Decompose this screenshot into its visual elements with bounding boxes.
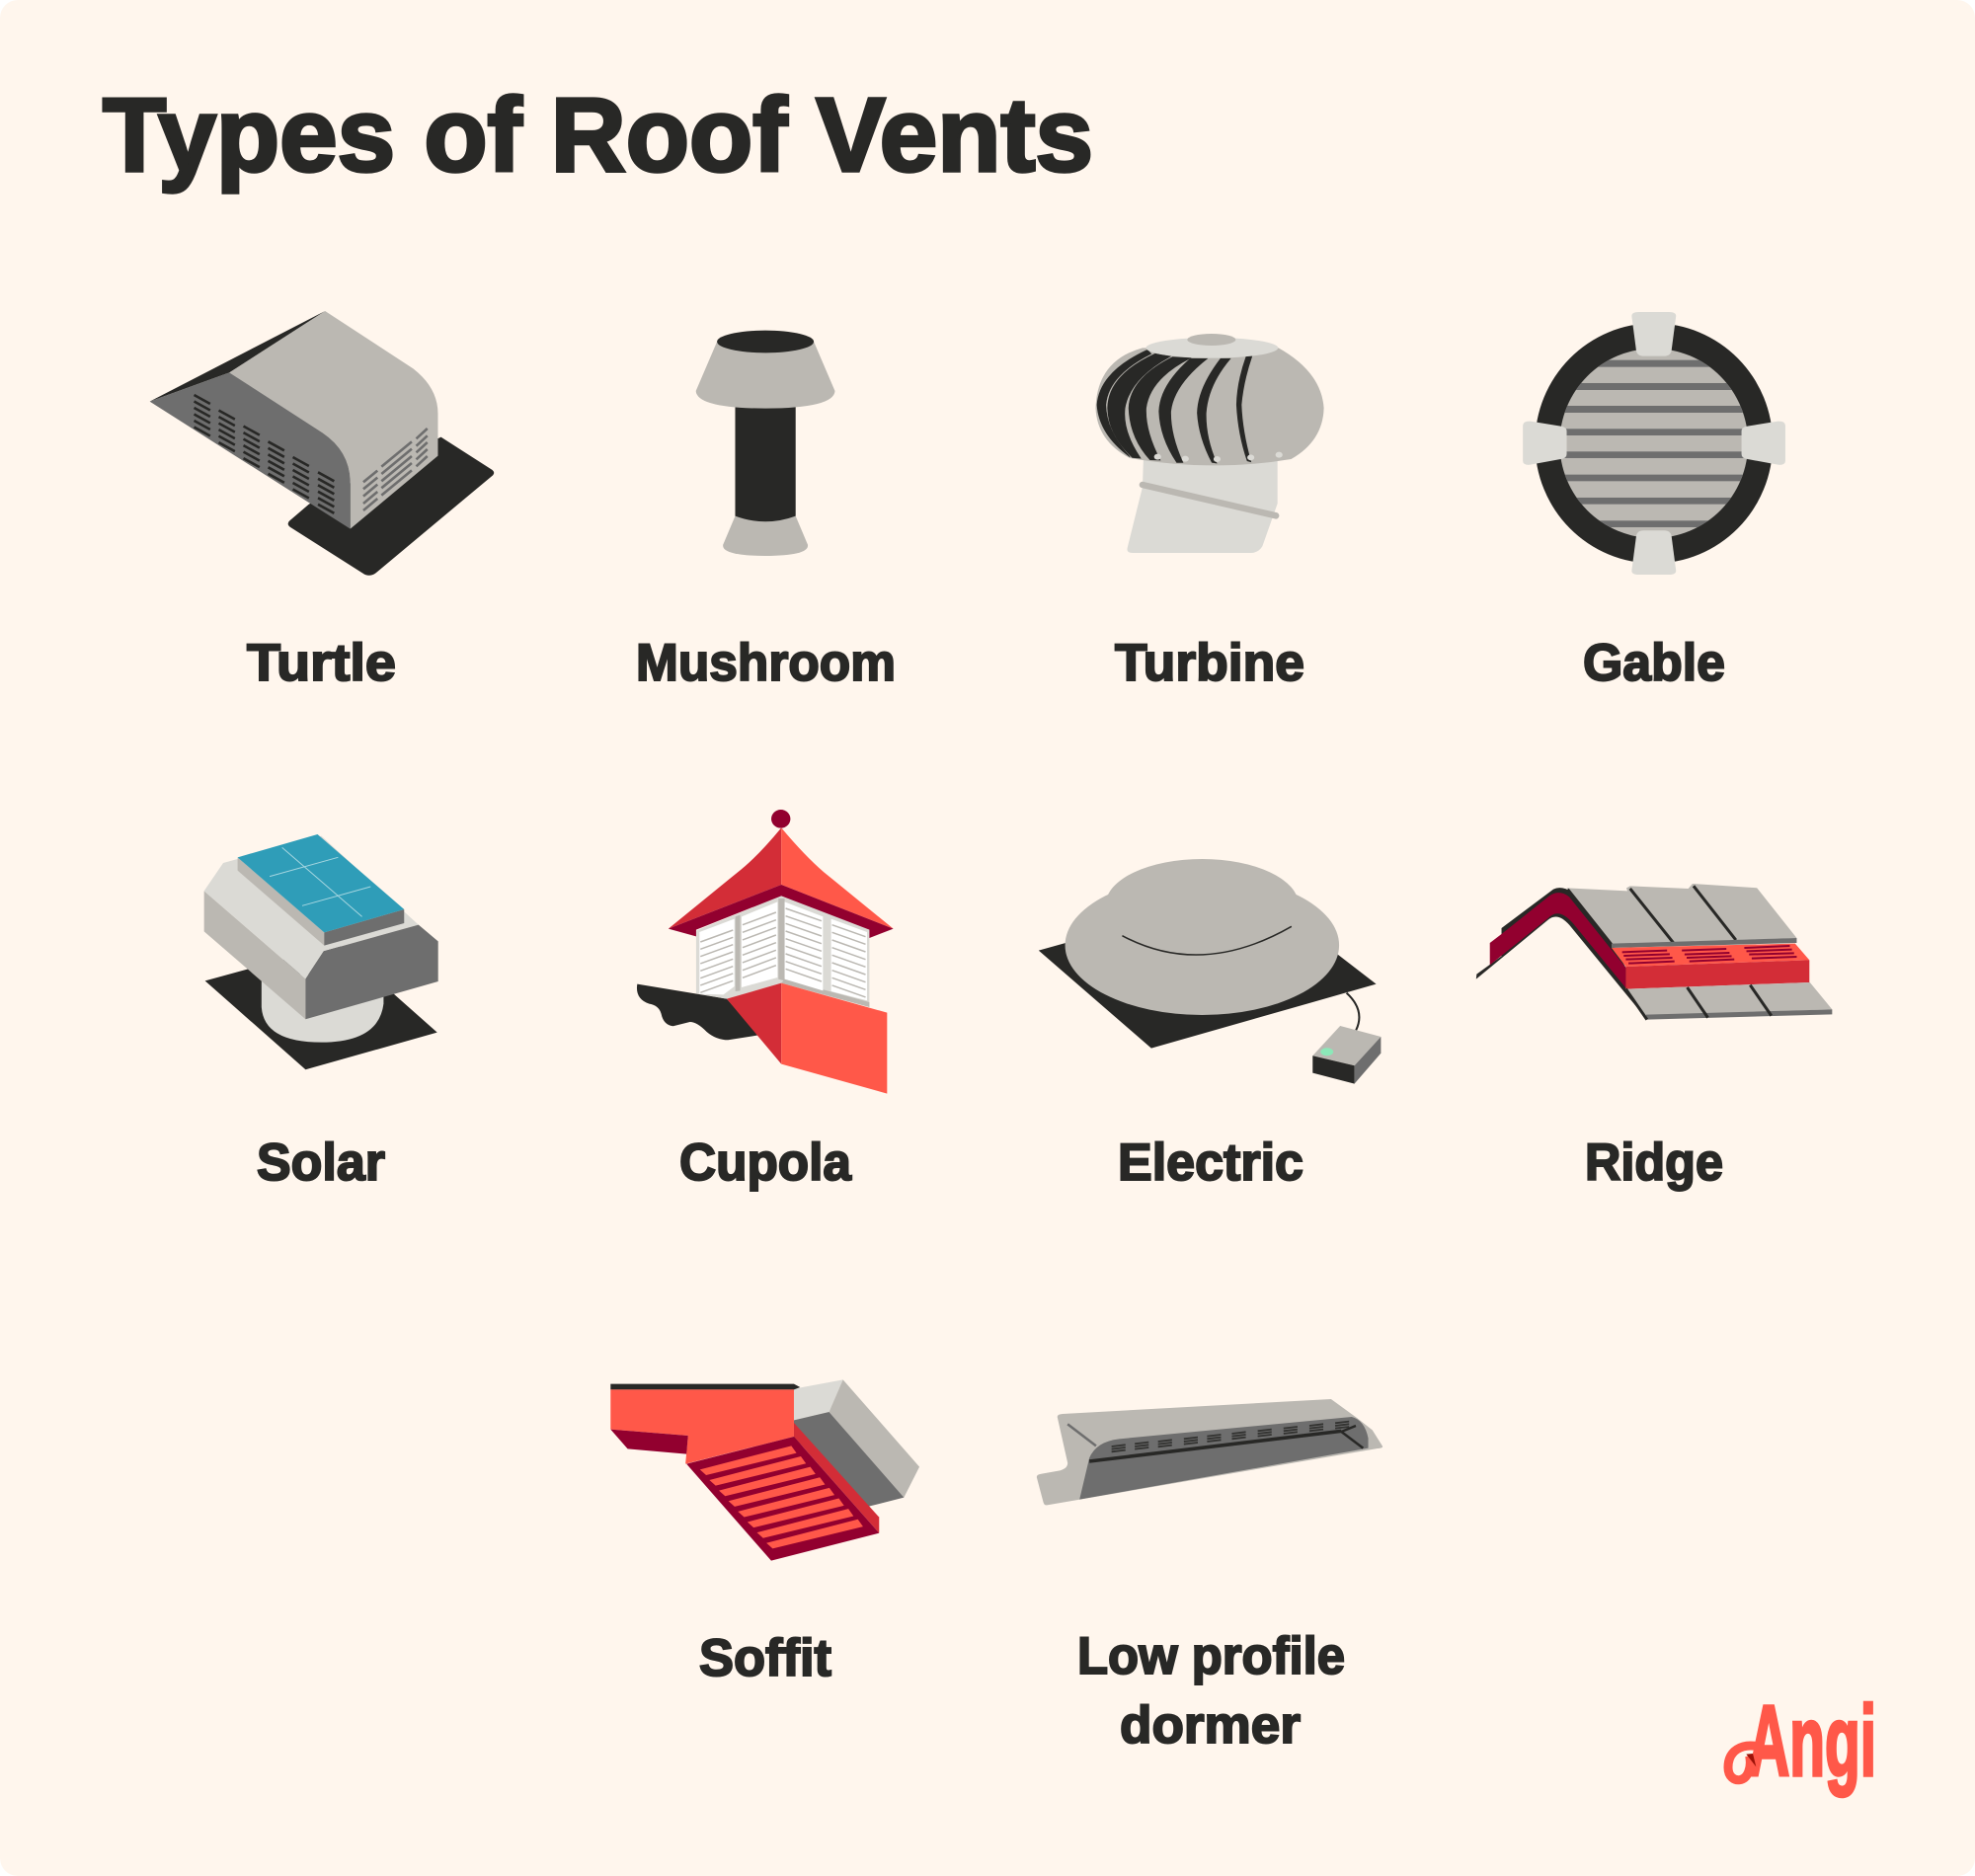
- label: Low profile dormer: [1077, 1627, 1345, 1755]
- panel: low profile dormer vent: [1037, 1399, 1382, 1755]
- icon: cupola vent: [637, 810, 894, 1094]
- panel: soffit vent: [610, 1379, 919, 1687]
- icon: electric vent: [1039, 859, 1381, 1084]
- icon: turbine vent: [1095, 334, 1324, 553]
- label: Soffit: Soffit: [699, 1629, 831, 1687]
- icon: gable vent: [1523, 312, 1785, 575]
- panel: turbine vent: [1095, 334, 1324, 692]
- label: Turtle: Turtle: [247, 634, 396, 692]
- panel: mushroom vent: [636, 331, 896, 692]
- label: Electric: Electric: [1118, 1133, 1304, 1192]
- logo: Angi: [1728, 1686, 1876, 1797]
- panel: solar vent: [204, 834, 438, 1192]
- label: Mushroom: Mushroom: [636, 634, 896, 692]
- panel: ridge vent: [1476, 884, 1832, 1192]
- panel: cupola vent: [637, 810, 894, 1192]
- label: Ridge: Ridge: [1585, 1133, 1723, 1192]
- label: Low profile dormer: Low profile: [1077, 1627, 1345, 1685]
- icon: low profile dormer vent: [1037, 1399, 1382, 1505]
- label: Cupola: Cupola: [679, 1133, 851, 1192]
- icon: mushroom vent: [696, 331, 835, 556]
- label: Solar: Solar: [257, 1133, 385, 1192]
- panel: turtle vent: [150, 311, 494, 692]
- title: Types of Roof Vents: [103, 77, 1093, 194]
- icon: ridge vent: [1476, 884, 1832, 1020]
- label: Turbine: Turbine: [1115, 634, 1304, 692]
- panel: electric vent: [1039, 859, 1381, 1192]
- label: Gable: Gable: [1583, 634, 1725, 692]
- icon: soffit vent: [610, 1379, 919, 1561]
- logo: Angi: Angi: [1748, 1686, 1876, 1797]
- icon: solar vent: [204, 834, 438, 1069]
- icon: turtle vent: [150, 311, 494, 576]
- panel: gable vent: [1523, 312, 1785, 692]
- label: Low profile dormer: dormer: [1120, 1696, 1301, 1755]
